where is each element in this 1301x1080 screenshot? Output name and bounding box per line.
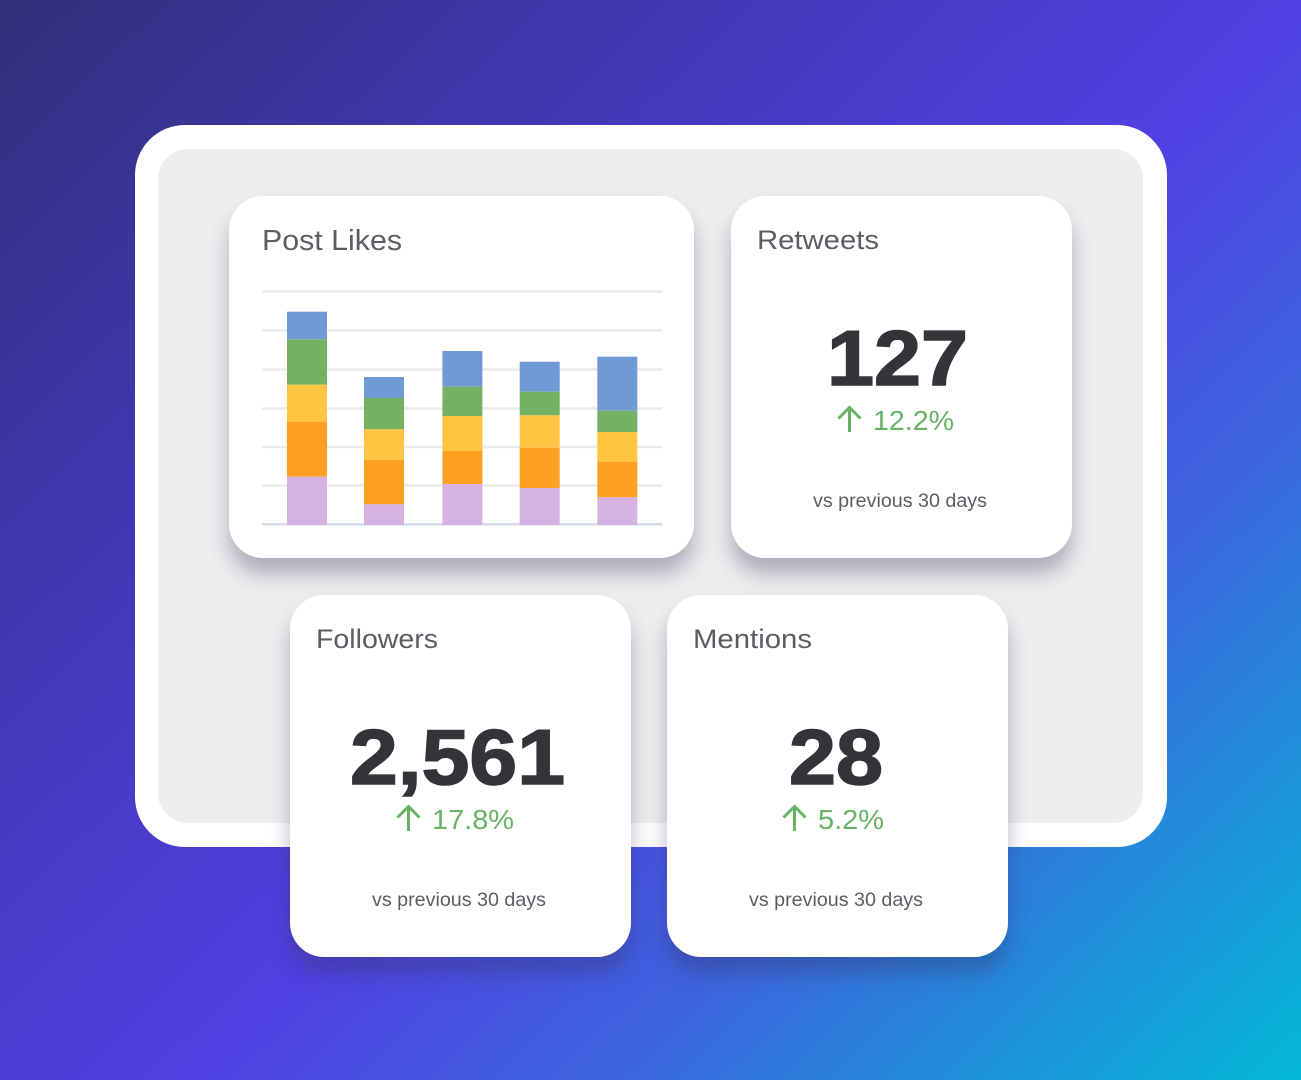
heading: followers: Followers	[316, 624, 438, 654]
change: 17.8%: 17.8%	[432, 804, 514, 835]
heading: mentions: Mentions	[693, 624, 812, 654]
value: 2,561: 2,561	[350, 713, 565, 801]
stacked bar chart	[262, 292, 662, 525]
panel: retweets card	[731, 196, 1072, 558]
value: 28: 28	[789, 713, 883, 801]
panel: grey tablet screen	[158, 149, 1143, 823]
heading: retweets: Retweets	[757, 225, 879, 255]
caption: vs previous 30 days	[372, 890, 546, 911]
icon: up arrow	[784, 806, 806, 831]
heading: post likes: Post Likes	[262, 225, 402, 257]
change: 5.2%: 5.2%	[818, 804, 884, 835]
caption: vs previous 30 days	[749, 890, 923, 911]
bar 5	[597, 357, 637, 525]
caption: vs previous 30 days	[813, 491, 987, 512]
icon: up arrow	[838, 408, 860, 432]
bar 4	[520, 362, 560, 525]
panel: white tablet frame	[135, 125, 1167, 847]
bar 3	[442, 351, 482, 525]
panel: post likes card	[229, 196, 694, 558]
icon: up arrow	[398, 806, 420, 831]
panel: followers card	[290, 595, 631, 957]
bar 1	[287, 312, 327, 525]
panel: mentions card	[667, 595, 1008, 957]
change: 12.2%: 12.2%	[873, 405, 954, 436]
bar 2	[364, 377, 404, 525]
value: 127: 127	[827, 314, 968, 402]
